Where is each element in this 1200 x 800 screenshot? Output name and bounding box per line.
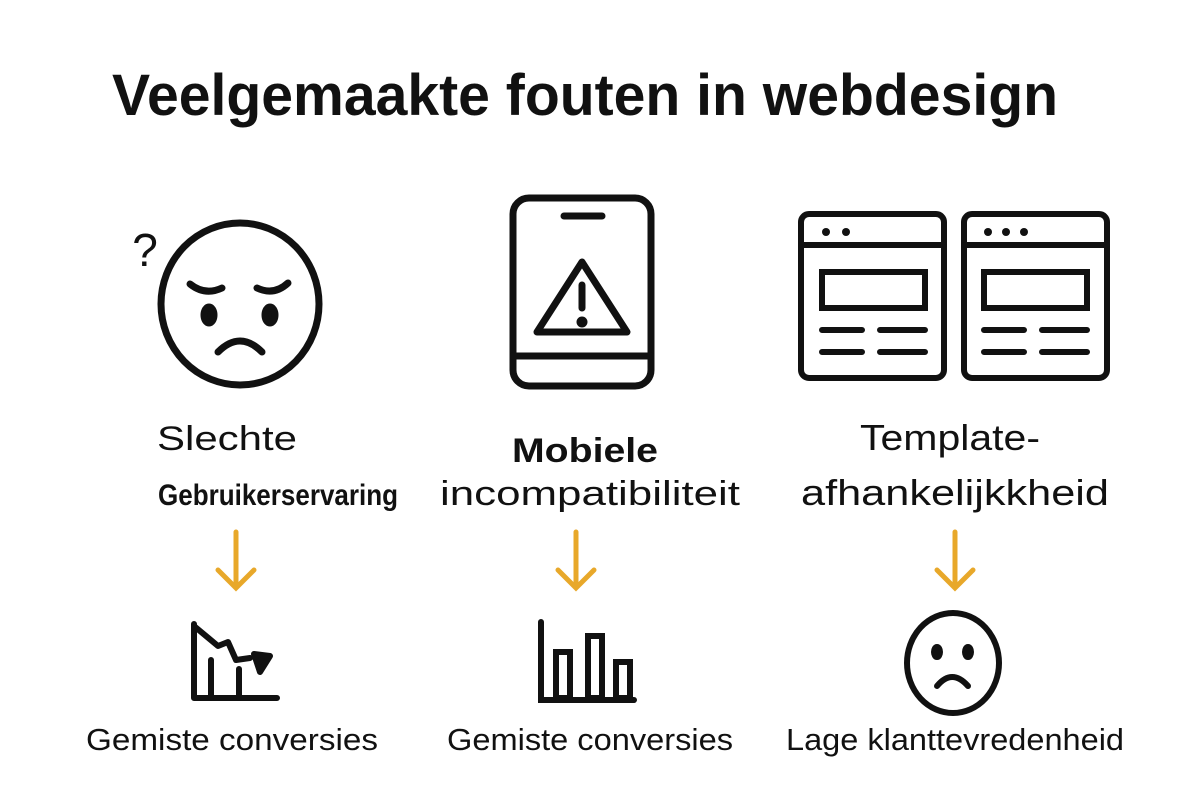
caption: Lage klanttevredenheid xyxy=(786,722,1124,757)
arrow xyxy=(218,532,254,588)
heading: afhankelijkkheid xyxy=(801,472,1109,513)
title: Veelgemaakte fouten in webdesign xyxy=(112,63,1058,128)
heading xyxy=(157,420,398,512)
heading: incompatibiliteit xyxy=(440,475,741,513)
arrow xyxy=(937,532,973,588)
icon: browser windows xyxy=(801,214,1107,378)
panel: mobile xyxy=(440,198,741,757)
icon: confused face xyxy=(132,223,319,385)
panel: user experience xyxy=(86,223,398,757)
arrow xyxy=(558,532,594,588)
heading: Gebruikerservaring xyxy=(158,479,398,512)
icon: declining chart xyxy=(194,624,277,698)
icon: confused face: ? xyxy=(132,224,158,276)
heading: Slechte xyxy=(157,420,297,458)
caption: Gemiste conversies xyxy=(86,722,378,757)
icon: bar chart xyxy=(541,622,634,700)
icon: sad face xyxy=(907,613,999,713)
heading: Mobiele xyxy=(512,432,658,470)
panel: template xyxy=(786,214,1124,757)
heading xyxy=(801,417,1109,513)
heading: Template- xyxy=(860,417,1040,458)
icon: phone warning xyxy=(513,198,651,386)
heading xyxy=(440,432,741,513)
caption: Gemiste conversies xyxy=(447,722,733,757)
